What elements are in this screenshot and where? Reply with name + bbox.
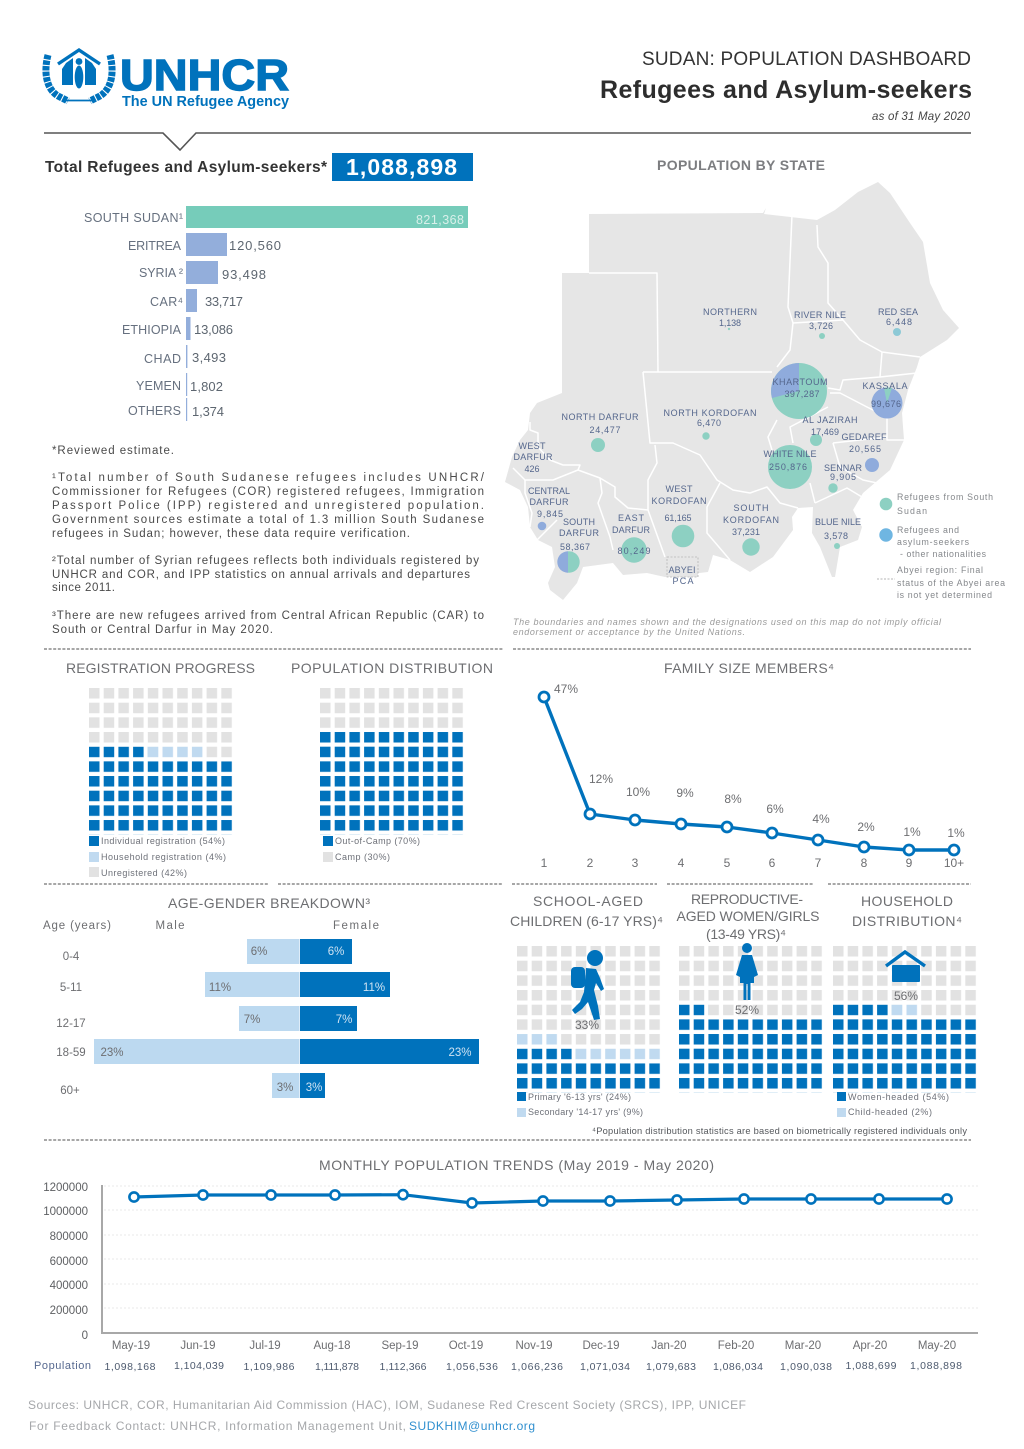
main title: Refugees and Asylum-seekers [600,76,972,104]
state labels: 6,470 [697,418,721,428]
chart: age-gender pyramid: 11% [209,982,231,994]
heading: population by state: POPULATION BY STATE [657,157,825,173]
line chart: monthly population: Dec-19 [582,1340,620,1352]
state labels: RIVER NILE [794,310,846,320]
map legend [877,492,1005,600]
state labels: DARFUR [559,528,600,538]
heading: reproductive-aged women: AGED WOMEN/GIRLS [676,908,820,924]
line chart: family size: 7 [815,856,822,870]
UNHCR logo [46,50,289,110]
bar chart: refugees by origin: 13,086 [194,322,233,337]
bar chart: refugees by origin: CHAD [144,352,181,366]
footnotes: ³There are new refugees arrived from Central African Republic (CAR) to [52,610,484,622]
heading: household distribution [852,893,962,929]
line chart: monthly population: 1,056,536 [446,1361,498,1373]
chart: age-gender pyramid: Age (years) [43,920,111,932]
state labels: NORTH KORDOFAN [664,408,756,418]
legend: registration progress [89,836,226,878]
line chart: family size: 8% [724,792,742,806]
dashboard kicker: SUDAN: POPULATION DASHBOARD [642,49,971,70]
state labels: 9,905 [830,472,856,482]
heading: reproductive-aged women [676,891,820,942]
line chart: monthly population: 1,088,699 [846,1360,897,1372]
legend: school-aged children [517,1092,643,1117]
state labels: 17,469 [811,427,839,437]
line chart: family size: 10+ [944,856,964,870]
household percentage: 56% [894,989,918,1003]
map landmass [505,182,959,600]
map legend: Sudan [897,506,927,516]
bar chart: refugees by origin: 93,498 [222,267,266,282]
state labels: DARFUR [612,525,650,535]
bar chart: refugees by origin: CAR⁴ [150,295,183,309]
heading: age-gender breakdown: AGE-GENDER BREAKDOWN³ [168,895,370,911]
state labels: KHARTOUM [772,377,828,387]
line chart: monthly population: Feb-20 [718,1340,754,1352]
line chart: monthly population: 1,104,039 [174,1360,224,1372]
icon: woman [736,943,758,1000]
chart: age-gender pyramid: 12-17 [56,1018,86,1030]
chart: age-gender pyramid [43,920,479,1098]
state labels [514,307,918,586]
line chart: family size: 2 [587,856,594,870]
map legend: Refugees and [897,525,959,535]
state labels: 80,249 [618,546,650,556]
legend: household distribution: Child-headed (2%) [848,1107,932,1117]
bar chart: refugees by origin: 33,717 [205,294,243,309]
line chart: monthly population: Jan-20 [651,1340,687,1352]
line chart: monthly population: 600000 [50,1256,88,1268]
chart: age-gender pyramid: 3% [306,1082,322,1094]
bar chart: refugees by origin: 1,802 [190,379,223,394]
footnotes: *Reviewed estimate. [52,445,174,457]
chart: age-gender pyramid: 5-11 [60,982,82,994]
footnotes: since 2011. [52,582,115,594]
heading: school-aged children: SCHOOL-AGED [533,893,643,909]
header rule with notch [44,133,971,150]
line chart: monthly population: 1,109,986 [244,1361,295,1373]
reproductive-aged percentage: 52% [735,1003,759,1017]
line chart: monthly population: 0 [82,1330,88,1342]
Abyei area [667,557,698,577]
title block [600,49,972,123]
state labels: SENNAR [824,463,862,473]
heading: school-aged children: CHILDREN (6-17 YRS)⁴ [510,913,663,929]
bar chart: refugees by origin: 3,493 [192,350,226,365]
state labels: NORTHERN [703,307,757,317]
legend: school-aged children: Primary '6-13 yrs' (24%) [528,1092,631,1102]
state labels: 426 [524,464,540,474]
line chart: family size: 8 [861,856,868,870]
line chart: family size: 4% [812,812,830,826]
waffle: population distribution [320,688,467,835]
map legend: Abyei region: Final [897,565,983,575]
footnotes: UNHCR and COR, and IPP statistics on annual arrivals and departures [52,569,470,581]
state labels: 20,565 [849,444,881,454]
heading: family size: FAMILY SIZE MEMBERS⁴ [664,660,834,676]
footnotes: Passport Police (IPP) registered and unregistered population. [52,500,484,512]
line chart: monthly population: Jun-19 [180,1340,216,1352]
line chart: monthly population: 1,071,034 [580,1361,630,1373]
footer: contact: For Feedback Contact: UNHCR, Information Management Unit, [29,1419,406,1433]
map legend: status of the Abyei area [897,578,1005,588]
chart: age-gender pyramid: 6% [251,946,267,958]
heading: monthly population trends: MONTHLY POPULATION TRENDS (May 2019 - May 2020) [319,1157,714,1173]
state labels: 61,165 [664,513,692,523]
footnotes: Government sources estimate a total of 1.3 million South Sudanese [52,514,484,526]
map legend: is not yet determined [897,590,992,600]
legend: registration progress: Individual registration (54%) [101,836,225,846]
chart: age-gender pyramid: 18-59 [56,1047,86,1059]
line chart: monthly population: 800000 [50,1231,88,1243]
footnotes: Commissioner for Refugees (COR) registered refugees, Immigration [52,486,484,498]
map: Sudan states [505,182,1005,637]
line chart: family size: 1% [947,826,965,840]
waffle: school-aged children [517,946,664,1093]
line chart: monthly population: 1,066,236 [511,1361,563,1373]
logo wordmark: UNHCR [120,51,289,100]
bar chart: refugees by origin: 1,374 [192,404,224,419]
heading: reproductive-aged women: REPRODUCTIVE- [691,891,803,907]
line chart: monthly population: May-19 [112,1340,150,1352]
waffle: registration progress [89,688,236,835]
biometric footnote: ⁴Population distribution statistics are based on biometrically registered individuals only [592,1126,967,1136]
state labels: NORTH DARFUR [562,412,639,422]
footnotes: refugees in Sudan; however, these data require verification. [52,528,410,540]
footnotes: ¹Total number of South Sudanese refugees includes UNHCR/ [52,472,485,484]
total refugees headline [45,153,473,181]
line chart: monthly population: Mar-20 [785,1340,821,1352]
state labels: 99,676 [871,399,901,409]
state labels: WEST [518,441,546,451]
chart: age-gender pyramid: 60+ [60,1085,80,1097]
state labels: 3,578 [824,531,848,541]
state labels: GEDAREF [842,432,887,442]
state labels: BLUE NILE [815,517,861,527]
school-aged percentage: 33% [575,1018,599,1032]
total value box [332,153,473,181]
state labels: DARFUR [514,452,553,462]
heading: reproductive-aged women: (13-49 YRS)⁴ [706,926,786,942]
state labels: KORDOFAN [652,496,706,506]
legend: registration progress: Household registration (4%) [101,852,226,862]
line chart: monthly population: 1,090,038 [780,1361,832,1373]
state labels: WHITE NILE [764,449,816,459]
state labels: ABYEI [668,565,696,575]
bar chart: refugees by origin: 120,560 [229,238,281,253]
state bubbles [538,328,902,573]
map legend: asylum-seekers [897,537,970,547]
legend: household distribution: Women-headed (54%) [848,1092,949,1102]
line chart: family size: 6 [769,856,776,870]
line chart: monthly population: 1,112,366 [380,1361,427,1373]
logo tagline: The UN Refugee Agency [122,94,289,110]
line chart: family size: 4 [678,856,685,870]
state labels: CENTRAL [528,486,570,496]
state labels: EAST [618,513,644,523]
bar chart: refugees by origin: 821,368 [416,213,464,227]
line chart: monthly population: 1,098,168 [104,1361,156,1373]
total value: 1,088,898 [346,154,457,180]
state labels: SOUTH [734,503,768,513]
footer: contact: SUDKHIM@unhcr.org [409,1419,535,1433]
chart: age-gender pyramid: 7% [244,1014,260,1026]
bar chart: refugees by origin: YEMEN [136,379,181,393]
state labels: 6,448 [886,317,912,327]
chart: age-gender pyramid: Female [333,920,379,932]
bar chart: refugees by origin: SYRIA ² [139,266,183,280]
state labels: KORDOFAN [723,515,779,525]
line chart: family size: 9% [676,786,694,800]
bar chart: refugees by origin: ETHIOPIA [122,323,182,337]
legend: population distribution [323,836,420,862]
date: as of 31 May 2020 [872,111,971,123]
footer: sources: Sources: UNHCR, COR, Humanitarian Aid Commission (HAC), IOM, Sudanese Red Crescent Society (SRCS), IPP, UNICEF [28,1398,746,1412]
chart: age-gender pyramid: 3% [277,1082,293,1094]
legend: school-aged children: Secondary '14-17 yrs' (9%) [528,1107,643,1117]
line chart: monthly population: Aug-18 [313,1340,351,1352]
map disclaimer: The boundaries and names shown and the designations used on this map do not imply official [513,617,942,627]
line chart: monthly population [34,1182,978,1373]
bar chart: refugees by origin: ERITREA [128,239,182,253]
chart: age-gender pyramid: Male [156,920,184,932]
line chart: family size [539,682,965,870]
legend: population distribution: Camp (30%) [335,852,390,862]
icon: child with backpack [571,950,604,1020]
line chart: family size: 3 [632,856,639,870]
bar chart: refugees by origin [84,206,468,421]
line chart: monthly population: 1000000 [43,1206,88,1218]
legend: population distribution: Out-of-Camp (70%) [335,836,420,846]
line chart: monthly population: 1,079,683 [646,1361,696,1373]
state labels: RED SEA [878,307,918,317]
line chart: monthly population: Nov-19 [515,1340,553,1352]
line chart: monthly population: 400000 [50,1280,88,1292]
chart: age-gender pyramid: 0-4 [63,951,80,963]
footnotes: ²Total number of Syrian refugees reflects both individuals registered by [52,555,479,567]
heading: population distribution: POPULATION DISTRIBUTION [291,660,493,676]
line chart: family size: 5 [724,856,731,870]
line chart: family size: 1% [903,825,921,839]
map disclaimer: endorsement or acceptance by the United Nations. [513,627,745,637]
bar chart: refugees by origin: SOUTH SUDAN¹ [84,211,183,225]
chart: age-gender pyramid: 23% [100,1047,124,1059]
line chart: monthly population: Sep-19 [381,1340,419,1352]
footnotes: South or Central Darfur in May 2020. [52,624,273,636]
total label: Total Refugees and Asylum-seekers* [45,159,328,176]
heading: household distribution: HOUSEHOLD [861,893,953,909]
icon: UNHCR emblem [46,50,112,101]
state labels: KASSALA [862,381,908,391]
state labels: 1,138 [719,318,741,328]
line chart: family size: 6% [766,802,784,816]
icon: house [886,952,925,982]
state labels: DARFUR [530,497,569,507]
line chart: monthly population: 1,111,878 [315,1361,359,1373]
state boundaries [513,215,920,560]
waffle: reproductive-aged women [679,946,826,1093]
map legend: - other nationalities [900,549,987,559]
line chart: monthly population: Jul-19 [249,1340,281,1352]
state labels: 37,231 [732,527,760,537]
chart: age-gender pyramid: 11% [363,982,385,994]
line chart: family size: 47% [554,682,578,696]
chart: age-gender pyramid: 7% [336,1014,352,1026]
state labels: 3,726 [809,321,833,331]
waffle: household distribution [833,946,980,1093]
map legend: Refugees from South [897,492,993,502]
legend: registration progress: Unregistered (42%) [101,868,187,878]
line chart: family size: 1 [541,856,548,870]
heading: household distribution: DISTRIBUTION⁴ [852,913,962,929]
state labels: PCA [672,576,694,586]
line chart: monthly population: 1,088,898 [910,1360,962,1372]
legend: household distribution [837,1092,949,1117]
line chart: monthly population: May-20 [918,1340,956,1352]
state labels: WEST [666,484,693,494]
state labels: AL JAZIRAH [802,415,858,425]
line chart: monthly population: Oct-19 [449,1340,483,1352]
line chart: monthly population: 1,086,034 [713,1361,763,1373]
heading: school-aged children [510,893,663,929]
state labels: 250,876 [769,462,807,472]
state labels: 24,477 [590,425,620,435]
chart: age-gender pyramid: 23% [448,1047,472,1059]
bar chart: refugees by origin: OTHERS [128,404,181,418]
chart: age-gender pyramid: 6% [328,946,344,958]
state labels: SOUTH [563,517,595,527]
line chart: monthly population: 1200000 [43,1182,88,1194]
line chart: monthly population: Apr-20 [853,1340,887,1352]
state labels: 9,845 [537,509,563,519]
line chart: monthly population: 200000 [50,1305,88,1317]
state labels: 58,367 [560,542,590,552]
line chart: family size: 10% [626,785,650,799]
line chart: family size: 2% [857,820,875,834]
line chart: family size: 9 [906,856,913,870]
heading: registration progress: REGISTRATION PROGRESS [66,660,255,676]
state labels: 397,287 [784,389,820,399]
map disclaimer [513,617,942,637]
line chart: monthly population: Population [34,1360,91,1372]
line chart: family size: 12% [589,772,613,786]
footnotes [52,445,485,636]
